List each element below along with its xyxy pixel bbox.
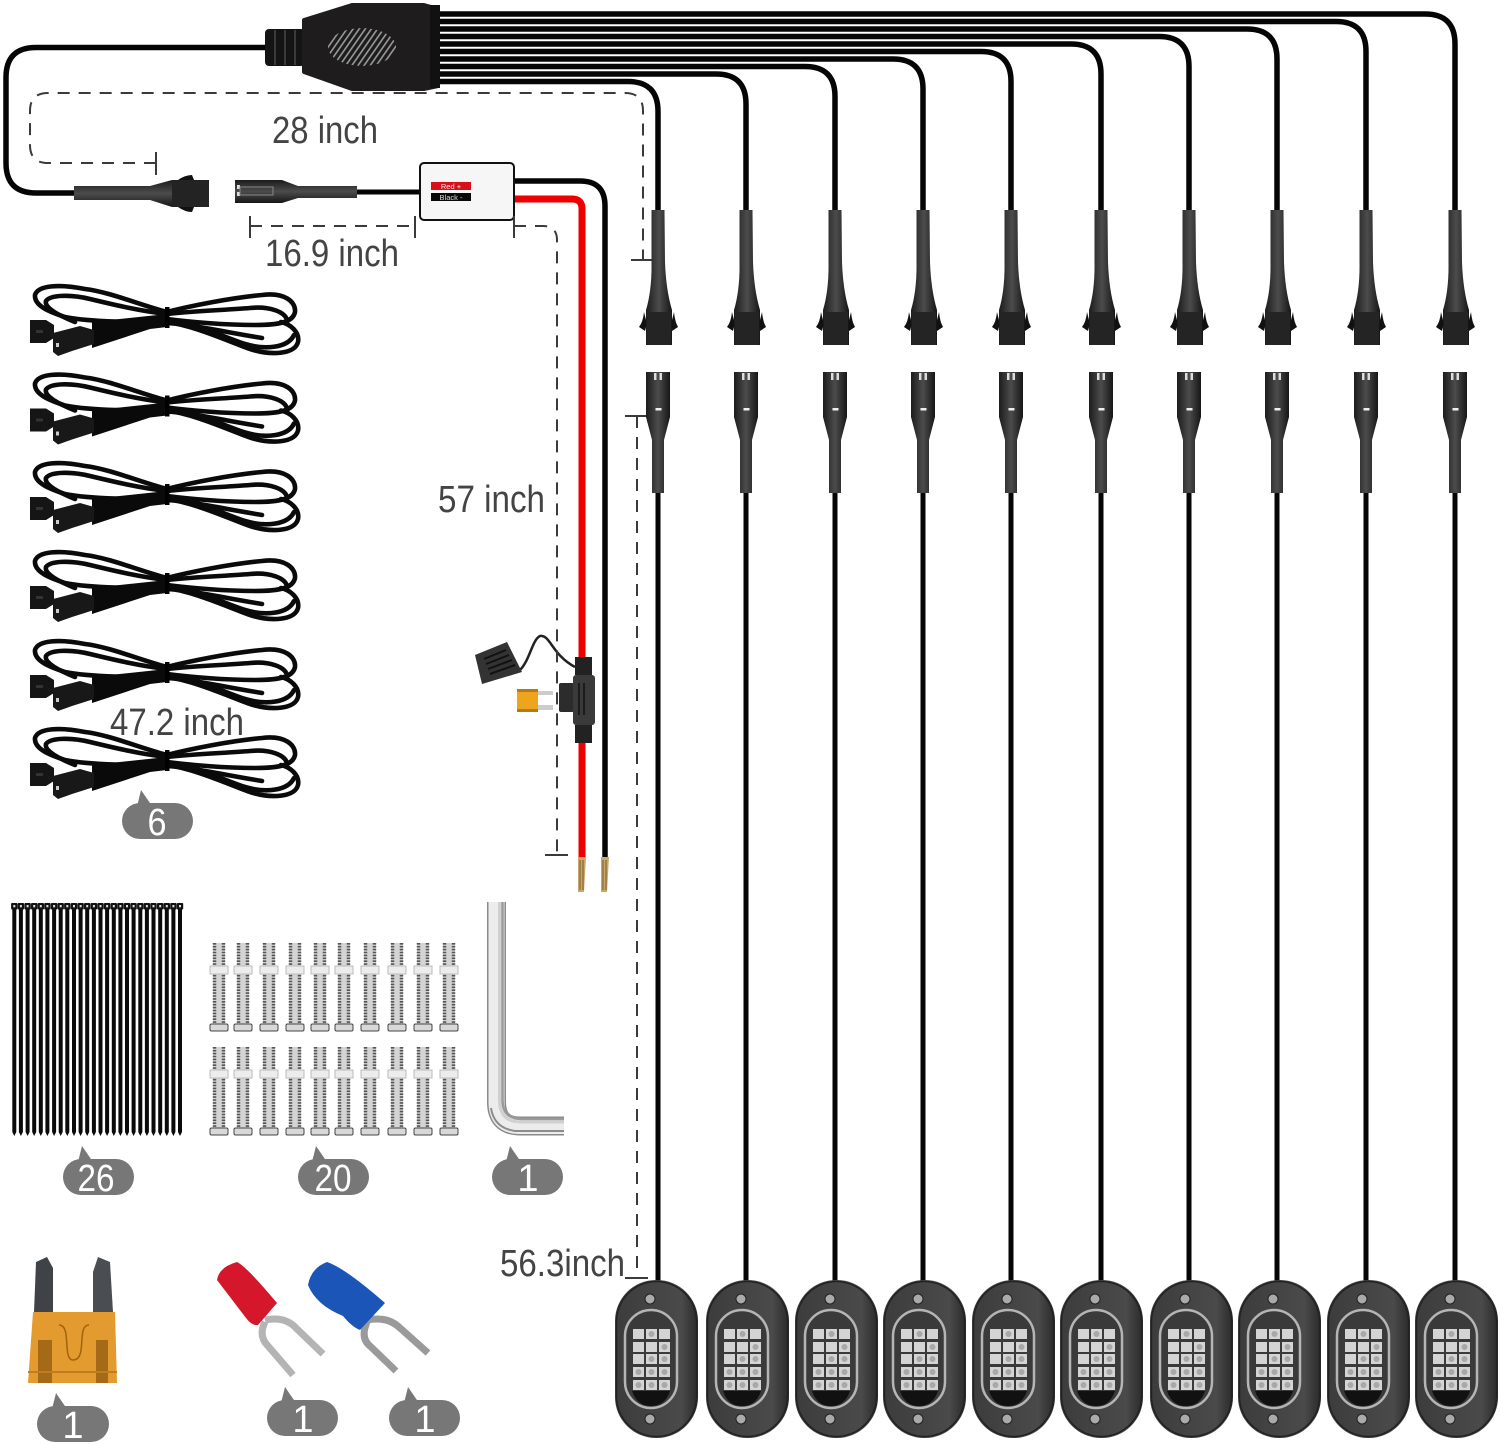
quantity badge: 1 (red terminal)	[267, 1387, 338, 1441]
red spade terminal	[217, 1262, 323, 1375]
quantity badge: 1 (allen key)	[492, 1146, 563, 1200]
label: 28 inch: 28 inch	[272, 110, 378, 152]
bolts and nuts	[210, 943, 458, 1135]
stripped wire ends	[578, 857, 609, 892]
quantity badge: 6: 6	[148, 802, 166, 844]
main cable to left plug	[6, 48, 270, 193]
controller box: Black -	[440, 193, 463, 202]
label: 47.2 inch: 47.2 inch	[110, 702, 244, 744]
power wires red and black	[512, 181, 605, 858]
quantity badge: 20	[298, 1146, 369, 1200]
quantity badge: 1 (blue terminal): 1	[414, 1399, 436, 1441]
left male plug	[74, 175, 209, 212]
label: 56.3 inch: 56.3inch	[500, 1243, 625, 1285]
zip ties	[11, 903, 183, 1136]
quantity badge: 6	[122, 790, 193, 844]
quantity badge: 1 (fuse)	[37, 1393, 109, 1444]
dimension line: 57 inch	[514, 216, 568, 855]
light cables	[658, 490, 1455, 1285]
controller box	[420, 163, 514, 220]
quantity badge: 1 (allen key): 1	[517, 1158, 539, 1200]
female plug and cable to controller	[235, 180, 422, 203]
dimension line: 28 inch	[30, 93, 655, 260]
thin cable bundle from splitter to the ten lights	[435, 14, 1455, 215]
rock lights row	[615, 1280, 1498, 1438]
label: 57 inch: 57 inch	[438, 479, 545, 521]
allen key	[491, 902, 564, 1131]
quantity badge: 26: 26	[78, 1158, 114, 1200]
quantity badge: 20: 20	[314, 1158, 352, 1200]
large blade fuse	[28, 1257, 117, 1383]
label: 16.9 inch: 16.9 inch	[265, 233, 399, 275]
controller box: Red +	[441, 182, 462, 191]
blue spade terminal	[308, 1262, 428, 1371]
lower connectors row	[646, 372, 1467, 493]
quantity badge: 26	[63, 1146, 134, 1200]
quantity badge: 1 (red terminal): 1	[292, 1399, 314, 1441]
quantity badge: 1 (blue terminal)	[389, 1387, 460, 1441]
dimension line: 16.9 inch	[250, 216, 415, 238]
splitter connector	[265, 5, 440, 89]
dimension line: 56.3 inch	[625, 416, 650, 1278]
upper connectors row	[639, 210, 1475, 345]
extension cable coils	[30, 286, 298, 799]
inline fuse holder	[475, 636, 595, 743]
